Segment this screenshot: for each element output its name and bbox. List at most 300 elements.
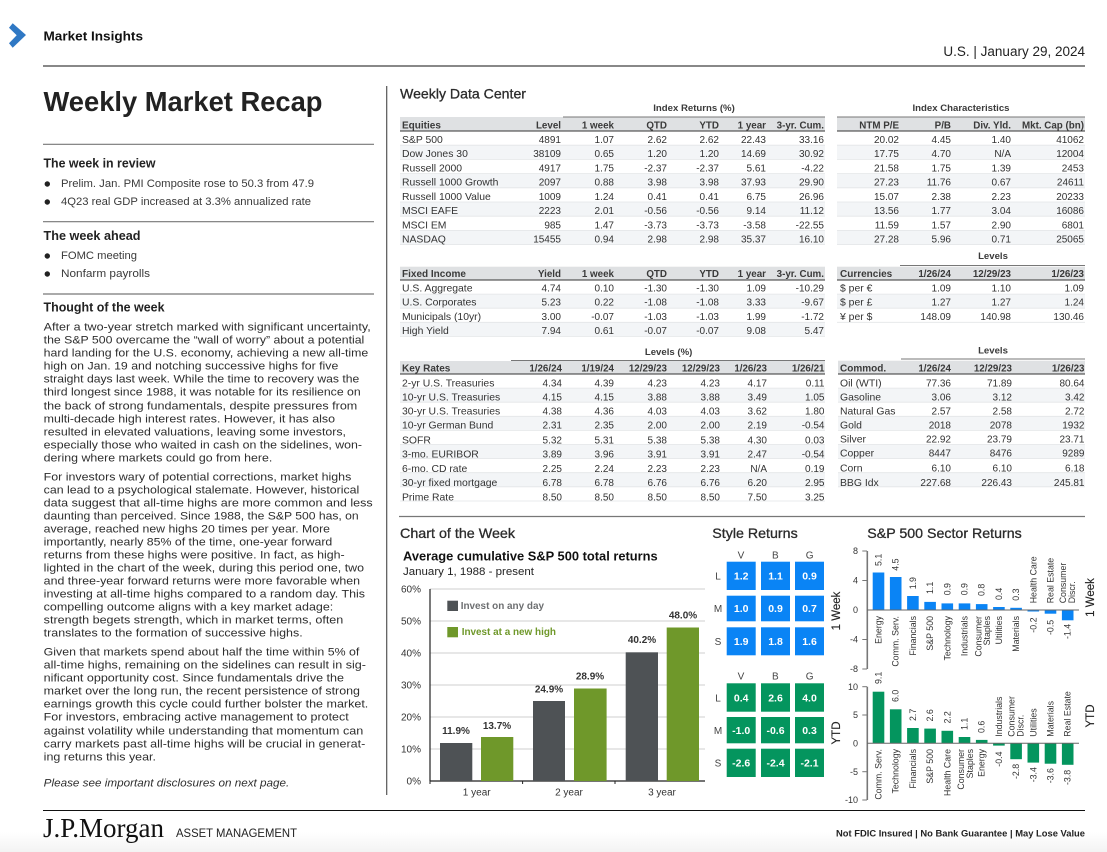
table: key rates: 10-yr German Bund (402, 421, 493, 432)
paragraph 1 (44, 322, 371, 465)
table: index characteristics: 4.70 (932, 149, 951, 160)
table: fixed income: 1.99 (747, 312, 766, 323)
table: key rates: 6.78 (595, 478, 614, 489)
bar chart: 1 week sector returns: -4 (850, 634, 858, 644)
table: key rates: 4.36 (595, 407, 614, 418)
table: fixed income: U.S. Aggregate (402, 284, 473, 295)
table: key rates: 10-yr U.S. Treasuries (402, 393, 500, 404)
heatmap: YTD (714, 671, 824, 777)
panel: style returns (712, 525, 824, 777)
table: equities returns: 1.20 (700, 149, 719, 160)
bar chart: YTD sector returns: 2.6 (925, 709, 935, 722)
table: index characteristics (837, 103, 1085, 246)
heading: Style Returns (712, 525, 798, 541)
table: fixed income: U.S. Corporates (402, 298, 476, 309)
bar chart: 1 week sector returns: 0.8 (977, 584, 987, 596)
table: currencies: 1.27 (992, 298, 1011, 309)
heatmap: 1 week: G (806, 550, 814, 561)
table: fixed income: 3.33 (747, 298, 766, 309)
bar chart: 1 week sector returns: Materials (1011, 615, 1021, 652)
table: currencies: 1.24 (1065, 298, 1084, 309)
bar chart: 28.9% (576, 671, 604, 682)
paragraph 1: multi-decade high interest rates. However, it has also (44, 414, 335, 426)
table: equities returns: 1.20 (648, 149, 667, 160)
table: commodities: Oil (WTI) (840, 379, 882, 390)
table: index characteristics: 16086 (1056, 206, 1084, 217)
table: commodities: 23.71 (1059, 435, 1085, 446)
table: equities returns: 30.92 (799, 149, 824, 160)
heading: Chart of the Week (400, 525, 516, 541)
table: key rates (400, 347, 825, 504)
table: commodities: 8447 (929, 449, 951, 460)
bar chart: 1 week sector returns: -0.2 (1028, 617, 1038, 633)
table: equities returns: MSCI EM (402, 220, 446, 231)
table: key rates: 8.50 (701, 493, 720, 504)
table: equities returns: 0.65 (595, 149, 614, 160)
heatmap: YTD: -2.1 (800, 758, 819, 770)
heatmap: 1 week: 1.2 (734, 570, 749, 582)
page footer (43, 810, 1085, 843)
table: currencies: 1/26/24 (918, 269, 952, 280)
table: key rates: 12/29/23 (629, 364, 668, 375)
table: index characteristics: 2.90 (992, 220, 1011, 231)
table: commodities: 6.10 (932, 463, 951, 474)
table: key rates: 1.05 (805, 393, 825, 404)
table: commodities (838, 345, 1085, 489)
table: key rates: 30-yr fixed mortgage (402, 478, 498, 489)
table: key rates: 1/26/23 (734, 364, 768, 375)
bar chart: YTD sector returns: 10 (848, 682, 858, 692)
bar chart: 30% (401, 680, 421, 692)
table: equities returns: 26.96 (799, 192, 824, 203)
table: equities returns: YTD (699, 120, 719, 132)
panel: the week ahead: FOMC meeting (61, 250, 137, 262)
paragraph 2: data suggest that all-time highs are more common and less (44, 498, 373, 510)
table: fixed income: 0.22 (595, 298, 614, 309)
panel: the week ahead: Nonfarm payrolls (61, 268, 150, 280)
panel: the week in review: The week in review (44, 156, 156, 171)
bar chart: YTD sector returns: -10 (845, 795, 858, 805)
table: key rates: 4.03 (701, 407, 720, 418)
paragraph 2: can lead to a psychological stalemate. However, historical (44, 485, 359, 497)
bar chart: YTD sector returns: Health Care (942, 749, 952, 796)
table: equities returns: 2.01 (595, 206, 614, 217)
bar chart (401, 584, 705, 799)
table: equities returns: 2.98 (648, 235, 667, 246)
table: commodities: Gasoline (840, 392, 881, 403)
table: key rates: 2.95 (805, 478, 825, 489)
table: currencies: 148.09 (920, 312, 951, 323)
table: fixed income: -1.30 (696, 284, 719, 295)
bar chart: 1 week sector returns: Consumer (973, 616, 983, 657)
table: key rates: 4.34 (543, 379, 562, 390)
paragraph 3: For investors, embracing active management to protect (44, 712, 350, 724)
table: fixed income: 4.74 (542, 284, 561, 295)
table: fixed income: 5.47 (805, 326, 824, 337)
bar chart: 13.7% (483, 721, 511, 732)
legend: Invest on any day (461, 601, 544, 612)
panel: thought of the week (44, 300, 373, 790)
side labels: YTD (1085, 704, 1097, 728)
table: index characteristics: 27.23 (874, 178, 899, 189)
brand label: Market Insights (44, 29, 143, 44)
table: index characteristics: P/B (935, 120, 951, 132)
table: key rates: 0.11 (806, 379, 825, 390)
bar chart: 1 week sector returns: 8 (853, 546, 858, 556)
heatmap: 1 week: M (714, 604, 722, 615)
table: equities returns: 1.47 (595, 220, 614, 231)
table: equities returns: 1.75 (595, 164, 614, 174)
table: fixed income: 3.00 (542, 312, 561, 323)
bar chart: 1 week sector returns: -8 (850, 664, 858, 674)
table: fixed income: 9.08 (747, 326, 766, 337)
paragraph 2: lighted in the chart of the week, during this period one, two (44, 563, 364, 575)
table: key rates: 3.91 (701, 450, 720, 461)
bar chart: 1 year (463, 788, 491, 799)
table: key rates: 6.20 (748, 478, 767, 489)
table: equities returns: 3-yr. Cum. (777, 120, 824, 132)
table: key rates: 6-mo. CD rate (402, 464, 467, 475)
paragraph 2: For investors wary of potential corrections, market highs (44, 472, 352, 484)
bar chart: YTD sector returns: 6.0 (891, 690, 901, 702)
table: commodities: 8476 (990, 449, 1012, 460)
title: Weekly Market Recap (44, 86, 322, 117)
heatmap: 1 week: L (715, 572, 721, 582)
bar chart: 20% (401, 712, 421, 724)
heatmap: 1 week: 1.8 (768, 636, 783, 648)
table: commodities: Levels (978, 345, 1008, 356)
table: key rates: SOFR (402, 436, 431, 447)
table: commodities: 2078 (990, 421, 1012, 432)
table: key rates: 4.15 (595, 393, 614, 404)
table: key rates: 3.88 (648, 393, 667, 404)
bar chart: 1 week sector returns: Industrials (960, 615, 970, 656)
table: index characteristics: 15.07 (874, 192, 899, 203)
paragraph 1: dering where markets could go from here. (44, 453, 272, 465)
table: key rates: 2.47 (748, 450, 767, 461)
table: commodities: 3.12 (993, 392, 1012, 403)
table: key rates: -0.54 (802, 450, 825, 461)
table: equities returns: QTD (646, 120, 667, 132)
table: fixed income: -1.30 (644, 284, 667, 295)
page header (9, 23, 1085, 66)
paragraph 1: straight days last week. While the time to recovery was the (44, 374, 359, 386)
paragraph 2: investing at all-time highs compared to a random day. This (44, 589, 365, 601)
table: key rates: 2-yr U.S. Treasuries (402, 379, 494, 390)
table: index characteristics: 24611 (1057, 178, 1084, 189)
bar chart: YTD sector returns: Staples (965, 748, 975, 778)
table: index characteristics: 4.45 (932, 135, 951, 146)
chart title: Average cumulative S&P 500 total returns (403, 550, 658, 564)
table: equities returns: S&P 500 (402, 135, 443, 146)
table: currencies: Currencies (840, 269, 893, 280)
table: key rates: 2.25 (543, 464, 562, 475)
table: equities returns: 2.62 (648, 135, 667, 146)
table: equities returns: -0.56 (696, 206, 719, 217)
table: key rates: 1/26/21 (792, 364, 825, 375)
table: key rates: Key Rates (402, 364, 451, 375)
paragraph 2: average, reached new highs 20 times per year. More (44, 523, 330, 535)
table: index characteristics: 11.76 (927, 178, 951, 189)
bar chart: 1 week sector returns: 4 (853, 576, 858, 586)
paragraph 3: market over the long run, the recent persistence of strong (44, 686, 360, 698)
table: key rates: 2.35 (595, 421, 614, 432)
table: fixed income: -1.03 (644, 312, 667, 323)
heatmap: 1 week: S (715, 637, 722, 648)
table: equities returns: 2.62 (700, 135, 719, 146)
table: equities returns: 1 week (582, 120, 615, 132)
table: key rates: 4.23 (701, 379, 720, 390)
heatmap: 1 week: B (772, 550, 779, 561)
heatmap: YTD: B (772, 671, 779, 682)
panel: the week in review: Prelim. Jan. PMI Composite rose to 50.3 from 47.9 (61, 178, 314, 190)
bar chart: YTD sector returns: Utilities (1028, 708, 1038, 737)
legend (447, 601, 556, 638)
bar chart: 24.9% (535, 685, 563, 696)
bar chart: YTD sector returns: Real Estate (1063, 691, 1073, 737)
table: fixed income: 1 week (582, 269, 615, 280)
heatmap: 1 week: 0.9 (768, 603, 783, 615)
bar chart: YTD sector returns: Comm. Serv. (874, 749, 884, 800)
table: equities returns: 1 year (738, 120, 766, 132)
table: fixed income: 7.94 (542, 326, 561, 337)
bar chart: YTD sector returns: S&P 500 (925, 749, 935, 784)
table: commodities: 23.79 (987, 435, 1012, 446)
table: equities returns: -3.73 (644, 220, 667, 231)
table: index characteristics: 0.71 (992, 235, 1011, 246)
table: key rates: 5.38 (701, 436, 720, 447)
paragraph 3: Given that markets spend about half the time within 5% of (44, 647, 360, 659)
table: key rates: 6.76 (648, 478, 667, 489)
table: index characteristics: 1.39 (992, 164, 1011, 174)
heatmap: YTD: M (714, 726, 722, 737)
paragraph 1: After a two-year stretch marked with significant uncertainty, (44, 322, 371, 334)
table: key rates: Levels (%) (645, 347, 692, 358)
table: equities returns: 9.14 (747, 206, 766, 217)
bar chart: YTD sector returns: 0 (853, 738, 858, 748)
bar chart: 1 week sector returns: Discr. (1067, 581, 1077, 603)
bar chart: 1 week sector returns: 0.9 (960, 583, 970, 595)
bar chart: 1 week sector returns: 1.1 (925, 582, 935, 594)
bar chart: 1 week sector returns: Technology (942, 615, 952, 661)
table: commodities: 12/29/23 (974, 364, 1013, 375)
paragraph 2: and three-year forward returns were more favorable when (44, 576, 360, 588)
table: key rates: 3.96 (595, 450, 614, 461)
icon: blue chevron (9, 23, 26, 48)
bar chart: 1 week sector returns: Financials (908, 615, 918, 656)
bar chart: 1 week sector returns: 1.9 (908, 577, 918, 589)
table: fixed income: Municipals (10yr) (402, 312, 481, 323)
bar chart: 10% (401, 744, 421, 756)
table: index characteristics: 6801 (1062, 220, 1084, 231)
table: currencies: $ per £ (840, 298, 873, 309)
table: equities returns: Dow Jones 30 (402, 149, 468, 160)
table: equities returns: 985 (544, 220, 561, 231)
table: key rates: 2.23 (648, 464, 667, 475)
table: key rates: 8.50 (543, 493, 562, 504)
table: key rates: 2.00 (701, 421, 720, 432)
table: equities returns: 2223 (539, 206, 561, 217)
table: commodities: 3.42 (1065, 392, 1085, 403)
table: fixed income: 3-yr. Cum. (777, 269, 824, 280)
table: equities returns: -0.56 (644, 206, 667, 217)
heading: Weekly Data Center (400, 85, 526, 101)
table: commodities: 2.72 (1065, 407, 1085, 418)
table: equities returns (400, 103, 825, 246)
paragraph 2: compelling outcome aligns with a key market adage: (44, 602, 333, 614)
bar chart: YTD sector returns: -3.4 (1028, 767, 1038, 782)
table: key rates: 3.88 (701, 393, 720, 404)
paragraph 3: against volatility while understanding that momentum can (44, 726, 363, 738)
bar chart: YTD sector returns: 5 (853, 710, 858, 720)
heatmap: YTD: 2.6 (768, 692, 783, 704)
side labels: 1 Week (831, 591, 843, 630)
table: index characteristics: 27.28 (874, 235, 899, 246)
heatmap: 1 week: 0.9 (802, 570, 817, 582)
bar chart: 1 week sector returns: 0 (853, 605, 858, 615)
heatmap: YTD: -1.0 (732, 725, 750, 737)
bar chart: 3 year (648, 788, 677, 799)
heatmap: 1 week: 0.7 (802, 603, 817, 615)
table: key rates: 8.50 (648, 493, 667, 504)
paragraph 3: nificant opportunity cost. Since fundamentals drive the (44, 673, 344, 685)
bar chart: 1 week sector returns: 5.1 (874, 554, 884, 566)
table: equities returns: 11.12 (800, 206, 824, 217)
table: key rates: 2.00 (648, 421, 667, 432)
table: key rates: 4.38 (543, 407, 562, 418)
table: equities returns: 6.75 (747, 192, 766, 203)
table: currencies: 1/26/23 (1051, 269, 1085, 280)
table: index characteristics: 21.58 (874, 164, 899, 174)
table: equities returns: -4.22 (801, 164, 824, 174)
table: key rates: 0.03 (805, 436, 825, 447)
heatmap: YTD: -2.4 (766, 758, 785, 770)
table: equities returns: 1.24 (595, 192, 614, 203)
bar chart: YTD sector returns: 2.2 (942, 711, 952, 724)
table: fixed income: -0.07 (591, 312, 614, 323)
table: commodities: 80.64 (1059, 379, 1085, 390)
paragraph 1: third longest since 1988, it was notable for its resilience on (44, 387, 361, 399)
bar chart: YTD sector returns: -5 (850, 767, 858, 777)
paragraph 1: the S&P 500 overcame the “wall of worry” about a potential (44, 335, 364, 347)
heatmap: YTD: G (806, 671, 814, 682)
table: key rates: 3.89 (543, 450, 562, 461)
table: currencies: 1.09 (1065, 284, 1084, 295)
table: key rates: 4.15 (543, 393, 562, 404)
disclosure note: Please see important disclosures on next page. (44, 778, 289, 790)
bar chart: YTD sector returns: 1.1 (960, 718, 970, 730)
table: fixed income: -1.03 (696, 312, 719, 323)
panel: S&P 500 sector returns (831, 525, 1097, 805)
bar chart: YTD sector returns: Financials (908, 748, 918, 789)
paragraph 3: all-time highs, remaining on the sidelines can result in sig- (44, 660, 366, 672)
table: commodities: 1/26/23 (1052, 364, 1085, 375)
table: fixed income: -1.08 (696, 298, 719, 309)
table: index characteristics: 12004 (1056, 149, 1084, 160)
table: currencies: 12/29/23 (973, 269, 1012, 280)
bar chart: 1 week sector returns: -1.4 (1063, 624, 1073, 639)
table: index characteristics: 1.77 (932, 206, 951, 217)
table: key rates: 3-mo. EURIBOR (402, 450, 479, 461)
table: key rates: 6.76 (701, 478, 720, 489)
table: commodities: Gold (840, 421, 862, 432)
table: key rates: 3.62 (748, 407, 767, 418)
paragraph 1: especially those who waited in cash on the sidelines, won- (44, 439, 362, 451)
table: index characteristics: 2.23 (992, 192, 1011, 203)
panel: the week ahead: The week ahead (44, 228, 141, 243)
table: commodities: 71.89 (987, 379, 1012, 390)
table: key rates: 2.31 (543, 421, 562, 432)
table: commodities: Natural Gas (840, 407, 895, 418)
table: equities returns: 0.88 (595, 178, 614, 189)
bar chart: YTD sector returns: Technology (891, 748, 901, 794)
bar chart: 1 week sector returns: Consumer (1058, 563, 1068, 603)
table: equities returns: 14.69 (741, 149, 766, 160)
table: key rates: 7.50 (748, 493, 767, 504)
table: index characteristics: NTM P/E (859, 120, 899, 132)
table: key rates: 2.19 (748, 421, 767, 432)
table: currencies: 140.98 (980, 312, 1011, 323)
heatmap: 1 week: 1.1 (768, 570, 783, 582)
asset management label: ASSET MANAGEMENT (176, 828, 297, 840)
table: commodities: Copper (840, 449, 875, 460)
bar chart: 1 week sector returns: Staples (982, 615, 992, 645)
panel: the week in review (44, 156, 314, 208)
bar chart: 11.9% (442, 726, 470, 737)
table: key rates: 0.19 (805, 464, 825, 475)
heatmap: YTD: 0.4 (734, 692, 749, 704)
table: fixed income: -0.07 (644, 326, 667, 337)
table: key rates: 2.23 (701, 464, 720, 475)
table: equities returns: 4891 (539, 135, 561, 146)
table: equities returns: 37.93 (741, 178, 766, 189)
table: equities returns: 22.43 (741, 135, 766, 146)
table: index characteristics: 41062 (1056, 135, 1084, 146)
panel: the week in review: 4Q23 real GDP increased at 3.3% annualized rate (61, 196, 311, 208)
table: commodities: Commod. (840, 364, 886, 375)
table: currencies: 1.09 (932, 284, 951, 295)
table: equities returns: 2.98 (700, 235, 719, 246)
table: fixed income: 0.61 (595, 326, 614, 337)
bar chart: 1 week sector returns: 0.9 (942, 583, 952, 595)
table: equities returns: 15455 (533, 235, 561, 246)
bar chart: YTD sector returns: 9.1 (874, 672, 884, 684)
table: equities returns: 3.98 (700, 178, 719, 189)
bar chart: YTD sector returns: Consumer (1007, 696, 1017, 737)
panel: thought of the week: Thought of the week (44, 300, 165, 315)
table: index characteristics: 20233 (1056, 192, 1084, 203)
bar chart: 1 week sector returns: -0.5 (1046, 620, 1056, 635)
bar chart: YTD sector returns: -3.6 (1046, 768, 1056, 783)
table: index characteristics: 25065 (1056, 235, 1084, 246)
panel: weekly data center (400, 85, 1085, 504)
table: commodities: 2.57 (932, 407, 951, 418)
table: index characteristics: 5.96 (932, 235, 951, 246)
table: equities returns: Russell 2000 (402, 164, 462, 174)
bar chart: YTD sector returns: 0.6 (977, 721, 987, 733)
heatmap: YTD: -2.6 (732, 758, 750, 770)
bar chart: YTD sector returns: Industrials (994, 696, 1004, 737)
table: equities returns: -3.58 (743, 220, 766, 231)
bar chart: 1 week sector returns: 4.5 (891, 558, 901, 571)
table: equities returns: 5.61 (747, 164, 766, 174)
bar chart: 1 week sector returns: 0.3 (1011, 588, 1021, 601)
table: fixed income: -1.08 (644, 298, 667, 309)
table: equities returns: Russell 1000 Value (402, 192, 491, 203)
legend: Invest at a new high (462, 627, 556, 638)
table: currencies (837, 251, 1085, 323)
bar chart: 1 week sector returns: Real Estate (1046, 558, 1056, 603)
